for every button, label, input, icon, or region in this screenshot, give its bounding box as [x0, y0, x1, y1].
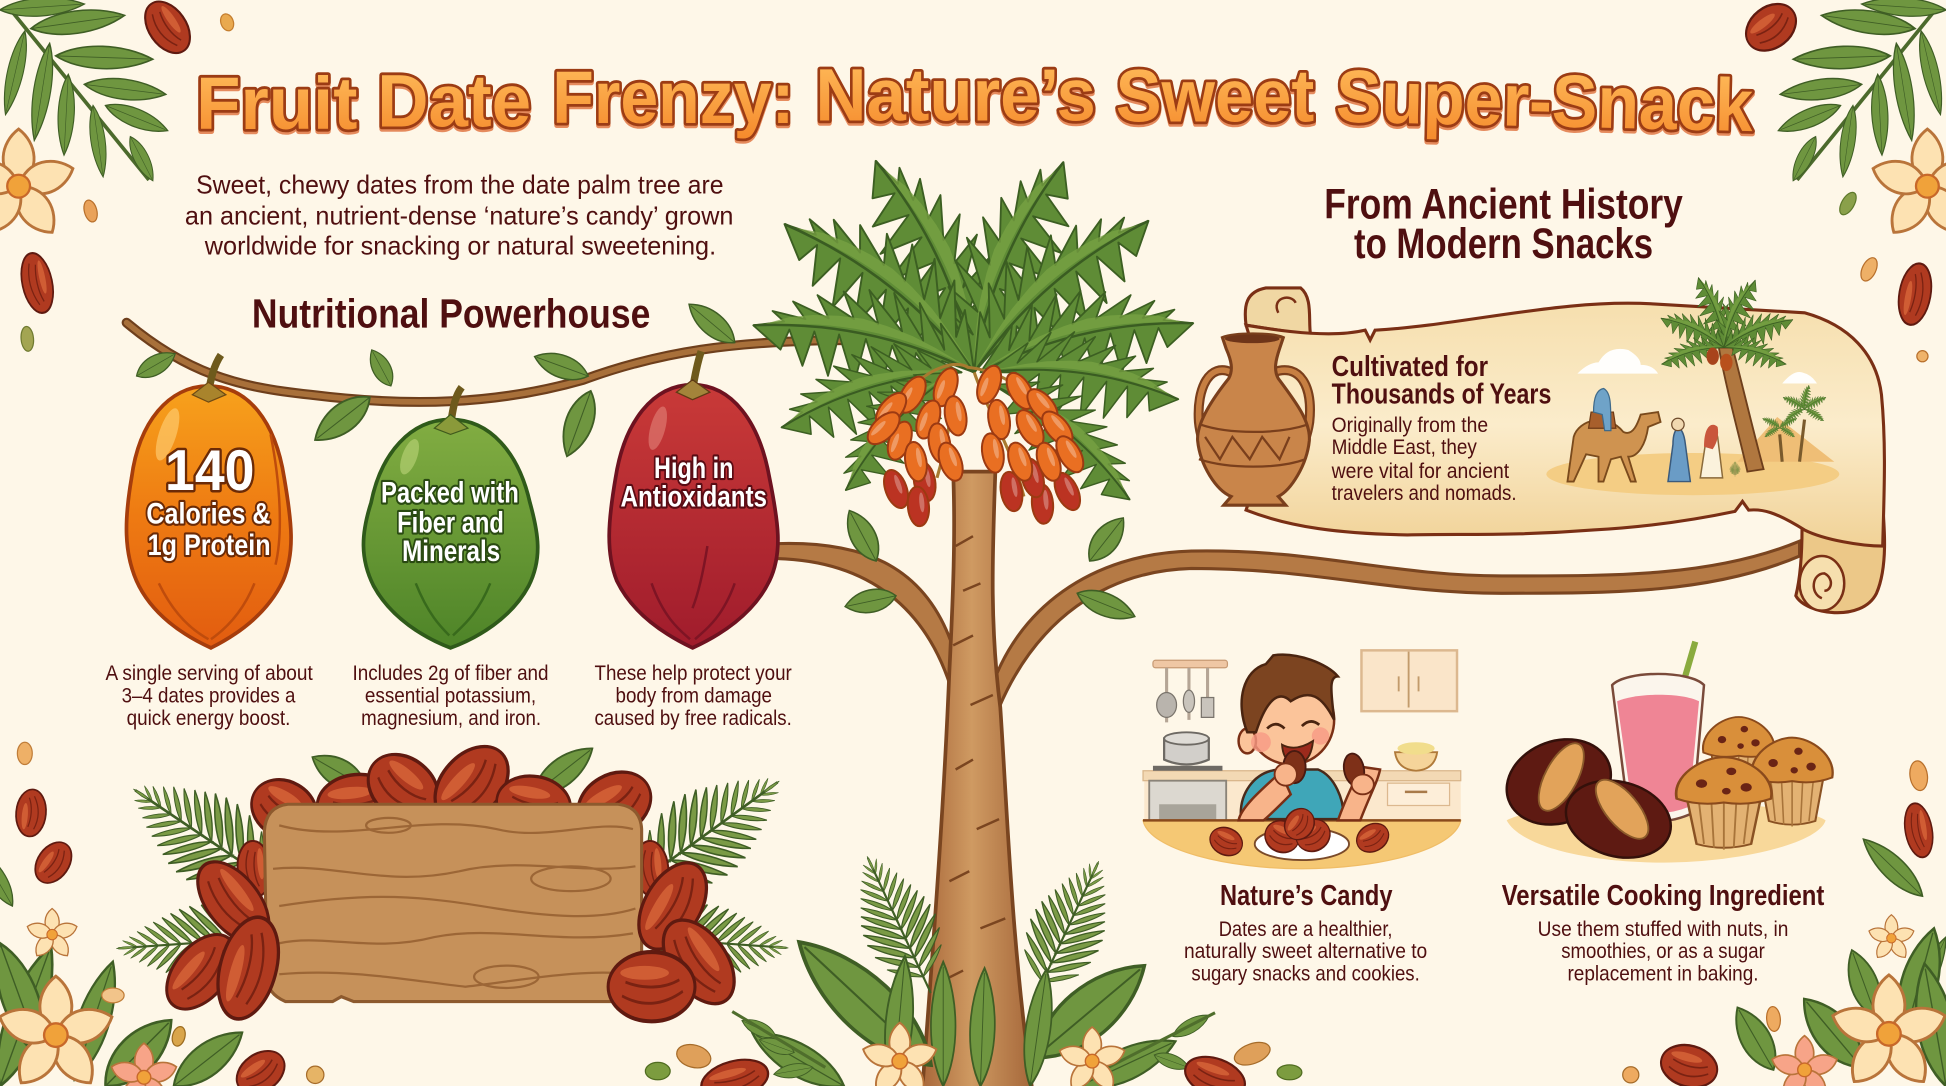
- parchment scroll panel: [1198, 271, 1885, 613]
- intro paragraph: an ancient, nutrient-dense ‘nature’s candy’ grown: [185, 201, 733, 231]
- text: Versatile Cooking Ingredient: smoothies, or as a sugar: [1561, 940, 1765, 963]
- text: Nature's Candy: [1184, 880, 1427, 986]
- text: Nature's Candy: Dates are a healthier,: [1219, 918, 1392, 941]
- table: [1143, 820, 1461, 869]
- caption: fiber: essential potassium,: [365, 684, 536, 707]
- heading: From Ancient History to Modern Snacks: to Modern Snacks: [1354, 220, 1653, 267]
- intro paragraph: [185, 170, 733, 260]
- caption: antioxidants: [594, 662, 792, 730]
- caption: antioxidants: body from damage: [616, 684, 772, 707]
- camel and rider: [1567, 412, 1661, 482]
- title: Sweet: [1116, 55, 1314, 138]
- branch leaves: [839, 505, 887, 567]
- ground foliage around trunk: [732, 839, 1215, 1086]
- scroll text: [1331, 351, 1551, 505]
- amphora jar: [1198, 334, 1310, 505]
- green date: fiber and minerals: Fiber and: [397, 506, 504, 539]
- scroll text: Thousands of Years: [1332, 378, 1551, 410]
- title: Fruit: [196, 62, 357, 145]
- scroll text: Cultivated for: [1332, 351, 1488, 383]
- left decoration: top-left palm sprig, flower and dates: [0, 0, 236, 352]
- kitchen background: [1144, 771, 1461, 820]
- small palms: [1780, 420, 1805, 462]
- red date: antioxidants: Antioxidants: [621, 480, 767, 513]
- scroll top-left curl: [1245, 288, 1311, 335]
- date bunch on palm: [862, 362, 1089, 527]
- heading: From Ancient History to Modern Snacks: [1324, 180, 1683, 267]
- text: Versatile Cooking Ingredient: Versatile Cooking Ingredient: [1502, 880, 1825, 912]
- illustration: boy eating dates in kitchen: [1143, 650, 1461, 869]
- orange date: 140 calories: 1g Protein: [148, 529, 271, 562]
- desert scene: [1546, 271, 1839, 495]
- caption: calories: A single serving of about: [105, 662, 313, 685]
- caption: fiber: magnesium, and iron.: [361, 707, 541, 730]
- right decoration: top-right palm sprig, flower and dates: [1737, 0, 1946, 362]
- title: Date: [377, 60, 531, 143]
- caption: fiber: [352, 662, 549, 730]
- text: Versatile Cooking Ingredient: Use them stuffed with nuts, in: [1538, 918, 1788, 941]
- heading: From Ancient History to Modern Snacks: From Ancient History: [1324, 180, 1683, 227]
- palm crown fronds: [746, 134, 1201, 522]
- caption: calories: [105, 662, 313, 730]
- bottom-right foliage, flowers and dates: [1179, 760, 1946, 1086]
- green date: fiber and minerals: Minerals: [402, 535, 500, 568]
- caption: antioxidants: caused by free radicals.: [594, 707, 792, 730]
- illustration: stuffed dates, smoothie and muffins: [1495, 642, 1833, 869]
- scroll bottom-right curl: [1796, 490, 1885, 613]
- intro paragraph: Sweet, chewy dates from the date palm tree are: [196, 170, 724, 200]
- orange date: 140 calories: [126, 355, 291, 648]
- left branch to red date: [777, 543, 953, 695]
- caption: antioxidants: These help protect your: [594, 662, 792, 685]
- plate of dates: [1205, 803, 1394, 861]
- scroll text: were vital for ancient: [1331, 460, 1509, 483]
- boy: [1239, 655, 1380, 820]
- orange date: 140 calories: Calories &: [146, 498, 271, 531]
- text: Nature's Candy: naturally sweet alternative to: [1184, 940, 1427, 963]
- text: Versatile Cooking Ingredient: replacement in baking.: [1567, 963, 1759, 986]
- title: Nature’s: [815, 53, 1096, 136]
- traveler in red headscarf: [1700, 429, 1723, 478]
- title: Frenzy:: [552, 56, 794, 139]
- scroll body: [1246, 303, 1884, 546]
- trunk: [922, 472, 1033, 1086]
- bottom-left foliage, flowers and dates: [0, 742, 772, 1086]
- caption: calories: quick energy boost.: [127, 707, 290, 730]
- clouds: [1577, 349, 1658, 374]
- scroll text: Middle East, they: [1332, 436, 1477, 459]
- text: Nature's Candy: sugary snacks and cookies.: [1191, 963, 1420, 986]
- right branch to scroll: [989, 541, 1800, 707]
- orange date: 140 calories: 140: [165, 439, 254, 503]
- red date: antioxidants: High in: [654, 452, 733, 485]
- intro paragraph: worldwide for snacking or natural sweetening.: [204, 230, 716, 260]
- traveler in blue robe: [1668, 428, 1690, 482]
- scroll text: Originally from the: [1332, 414, 1488, 437]
- red date: antioxidants: [609, 351, 778, 648]
- green date: fiber and minerals: [363, 387, 538, 648]
- scroll text: travelers and nomads.: [1332, 482, 1517, 505]
- palm tree trunk and branches: [777, 472, 1800, 1086]
- text: Versatile Cooking Ingredient: [1502, 880, 1825, 986]
- date hanging branch with leaves: [127, 296, 856, 461]
- large palm: [1719, 348, 1764, 472]
- heading: Nutritional Powerhouse: Nutritional Powerhouse: [252, 291, 650, 337]
- green date: fiber and minerals: Packed with: [381, 477, 519, 510]
- caption: fiber: Includes 2g of fiber and: [352, 662, 549, 685]
- wooden sign with pile of dates and palm fronds: [106, 732, 808, 1026]
- caption: calories: 3–4 dates provides a: [122, 684, 296, 707]
- text: Nature's Candy: Nature’s Candy: [1220, 880, 1393, 912]
- title: Super-Snack: [1335, 55, 1754, 147]
- title: [196, 53, 1754, 147]
